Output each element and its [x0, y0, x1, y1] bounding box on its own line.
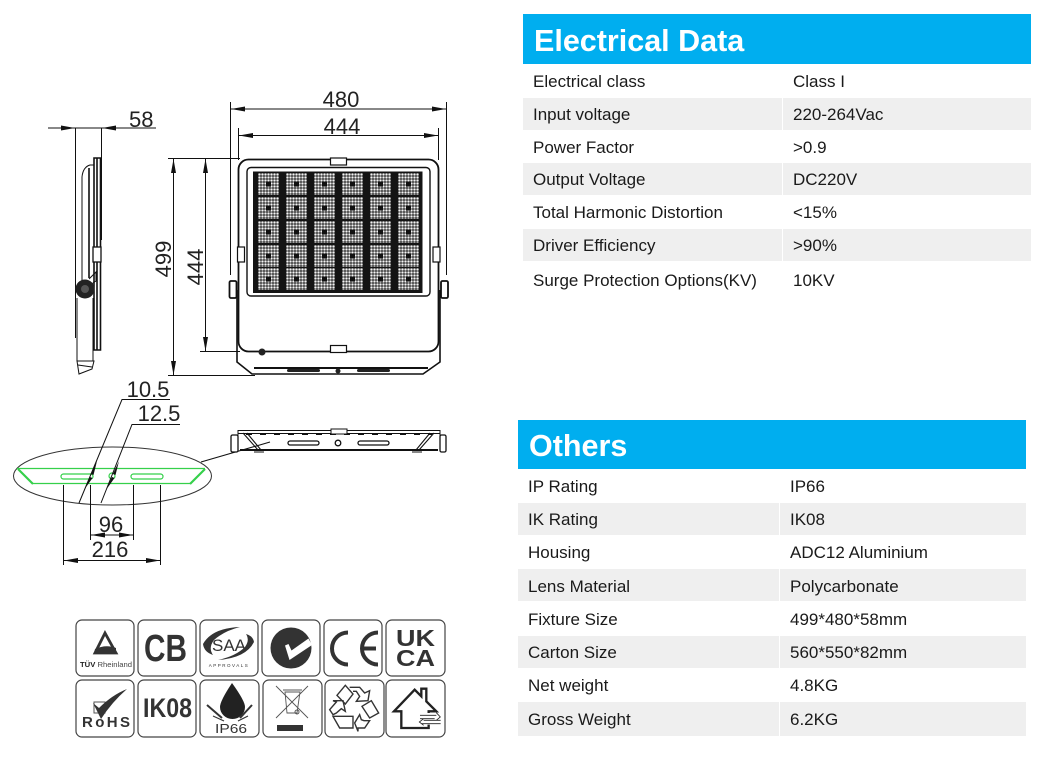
row: Carton Size: Carton Size — [528, 643, 617, 662]
heading: Others: Others — [529, 429, 627, 463]
icon: IK08 — [138, 680, 196, 737]
row: IP Rating — [528, 477, 825, 496]
icon: TUV Rheinland: TÜV Rheinland — [80, 660, 132, 669]
row: Input voltage: Input voltage — [533, 105, 630, 124]
panel: Others — [518, 420, 1026, 736]
icon: SAA: APPROVALS — [209, 663, 249, 668]
side profile — [76, 158, 101, 374]
row: Lens Material — [518, 569, 1026, 601]
row: IP Rating: IP Rating — [528, 477, 598, 496]
row: IP Rating: IP66 — [790, 477, 825, 496]
dimension: 10.5: 10.5 — [127, 377, 169, 402]
row: IK Rating: IK08 — [790, 510, 825, 529]
heading: Electrical Data: Electrical Data — [534, 24, 745, 58]
clips and hinges — [230, 158, 448, 374]
icon: indoor house — [386, 680, 445, 737]
fixture body — [230, 158, 448, 374]
dimension: 444 — [238, 114, 439, 160]
certification icons — [76, 620, 445, 737]
dimension: 480 — [230, 87, 447, 275]
row: Output Voltage: Output Voltage — [533, 170, 645, 189]
row: Total Harmonic Distortion: Total Harmonic Distortion — [533, 203, 723, 222]
dimension: 444 vertical: 444 — [183, 249, 208, 285]
row: Fixture Size: Fixture Size — [528, 610, 618, 629]
row: Input voltage — [523, 98, 1031, 130]
front view drawing — [151, 87, 448, 376]
dimension: 480: 480 — [323, 87, 359, 112]
row: Total Harmonic Distortion: <15% — [793, 203, 837, 222]
row: Output Voltage — [523, 163, 1031, 195]
icon: RoHS — [76, 680, 134, 737]
row: Lens Material: Lens Material — [528, 577, 630, 596]
row: Net weight: 4.8KG — [790, 676, 838, 695]
row: Lens Material: Polycarbonate — [790, 577, 899, 596]
dimension: 12.5: 12.5 — [138, 401, 180, 426]
row: Electrical class — [533, 72, 845, 91]
dimension: 499: 499 — [151, 241, 176, 277]
row: Fixture Size: 499*480*58mm — [790, 610, 907, 629]
row: Gross Weight: 6.2KG — [790, 710, 838, 729]
dimension: 444 vertical — [183, 158, 240, 352]
icon: IK08: IK08 — [143, 693, 192, 723]
icon: SAA — [200, 620, 258, 676]
dimension: 58 — [48, 107, 156, 338]
row: Total Harmonic Distortion — [533, 203, 837, 222]
dimension: 216 — [63, 485, 161, 565]
row: Carton Size — [518, 636, 1026, 668]
dimension: 10.5 — [79, 377, 170, 503]
row: Power Factor: >0.9 — [793, 138, 827, 157]
row: Driver Efficiency: >90% — [793, 236, 837, 255]
icon: TUV Rheinland — [76, 620, 134, 676]
dimension: 96 — [90, 485, 134, 540]
icon: UKCA — [386, 620, 445, 676]
icon: RoHS: RoHS — [82, 714, 130, 731]
row: Housing — [528, 543, 928, 562]
bottom view with detail ellipse — [14, 377, 446, 565]
row: Fixture Size — [528, 610, 907, 629]
heading: Others — [518, 420, 1026, 469]
row: Electrical class: Class I — [793, 72, 845, 91]
row: Driver Efficiency — [523, 229, 1031, 261]
dimension: 499 — [151, 158, 255, 376]
icon: WEEE bin — [263, 680, 322, 737]
row: Net weight — [528, 676, 838, 695]
row: Output Voltage: DC220V — [793, 170, 858, 189]
row: Driver Efficiency: Driver Efficiency — [533, 236, 656, 255]
heading: Electrical Data — [523, 14, 1031, 64]
side view drawing — [48, 107, 156, 374]
icon: SAA: SAA — [212, 636, 247, 655]
row: Surge Protection: Surge Protection Options(KV) — [533, 271, 757, 290]
icon: recycling — [325, 680, 384, 737]
icon: CB: CB — [144, 628, 187, 670]
icon: IP66: IP66 — [215, 721, 247, 736]
dimension: 96: 96 — [99, 512, 123, 537]
icon: IP66 — [200, 680, 259, 737]
row: Surge Protection: 10KV — [793, 271, 835, 290]
row: Power Factor — [533, 138, 827, 157]
icon: UKCA: CA — [396, 645, 435, 671]
icon: CE — [324, 620, 382, 676]
row: Power Factor: Power Factor — [533, 138, 634, 157]
row: Housing: Housing — [528, 543, 590, 562]
dimension: 444: 444 — [324, 114, 360, 139]
row: Carton Size: 560*550*82mm — [790, 643, 907, 662]
row: Electrical class: Electrical class — [533, 72, 645, 91]
row: Housing: ADC12 Aluminium — [790, 543, 928, 562]
dimension: 58: 58 — [129, 107, 153, 132]
row: Input voltage: 220-264Vac — [793, 105, 884, 124]
end elevation — [201, 429, 446, 462]
icon: CB — [138, 620, 196, 676]
row: IK Rating — [518, 503, 1026, 535]
icon: UKCA: UK — [396, 625, 435, 651]
row: Gross Weight: Gross Weight — [528, 710, 631, 729]
detail ellipse — [14, 447, 212, 505]
row: Net weight: Net weight — [528, 676, 609, 695]
panel: Electrical Data — [523, 14, 1031, 290]
row: Gross Weight — [518, 702, 1026, 736]
row: IK Rating: IK Rating — [528, 510, 598, 529]
dimension: 216: 216 — [92, 537, 128, 562]
LED module grid — [253, 172, 422, 293]
dimension: 12.5 — [101, 401, 180, 503]
icon: C-tick — [262, 620, 320, 676]
